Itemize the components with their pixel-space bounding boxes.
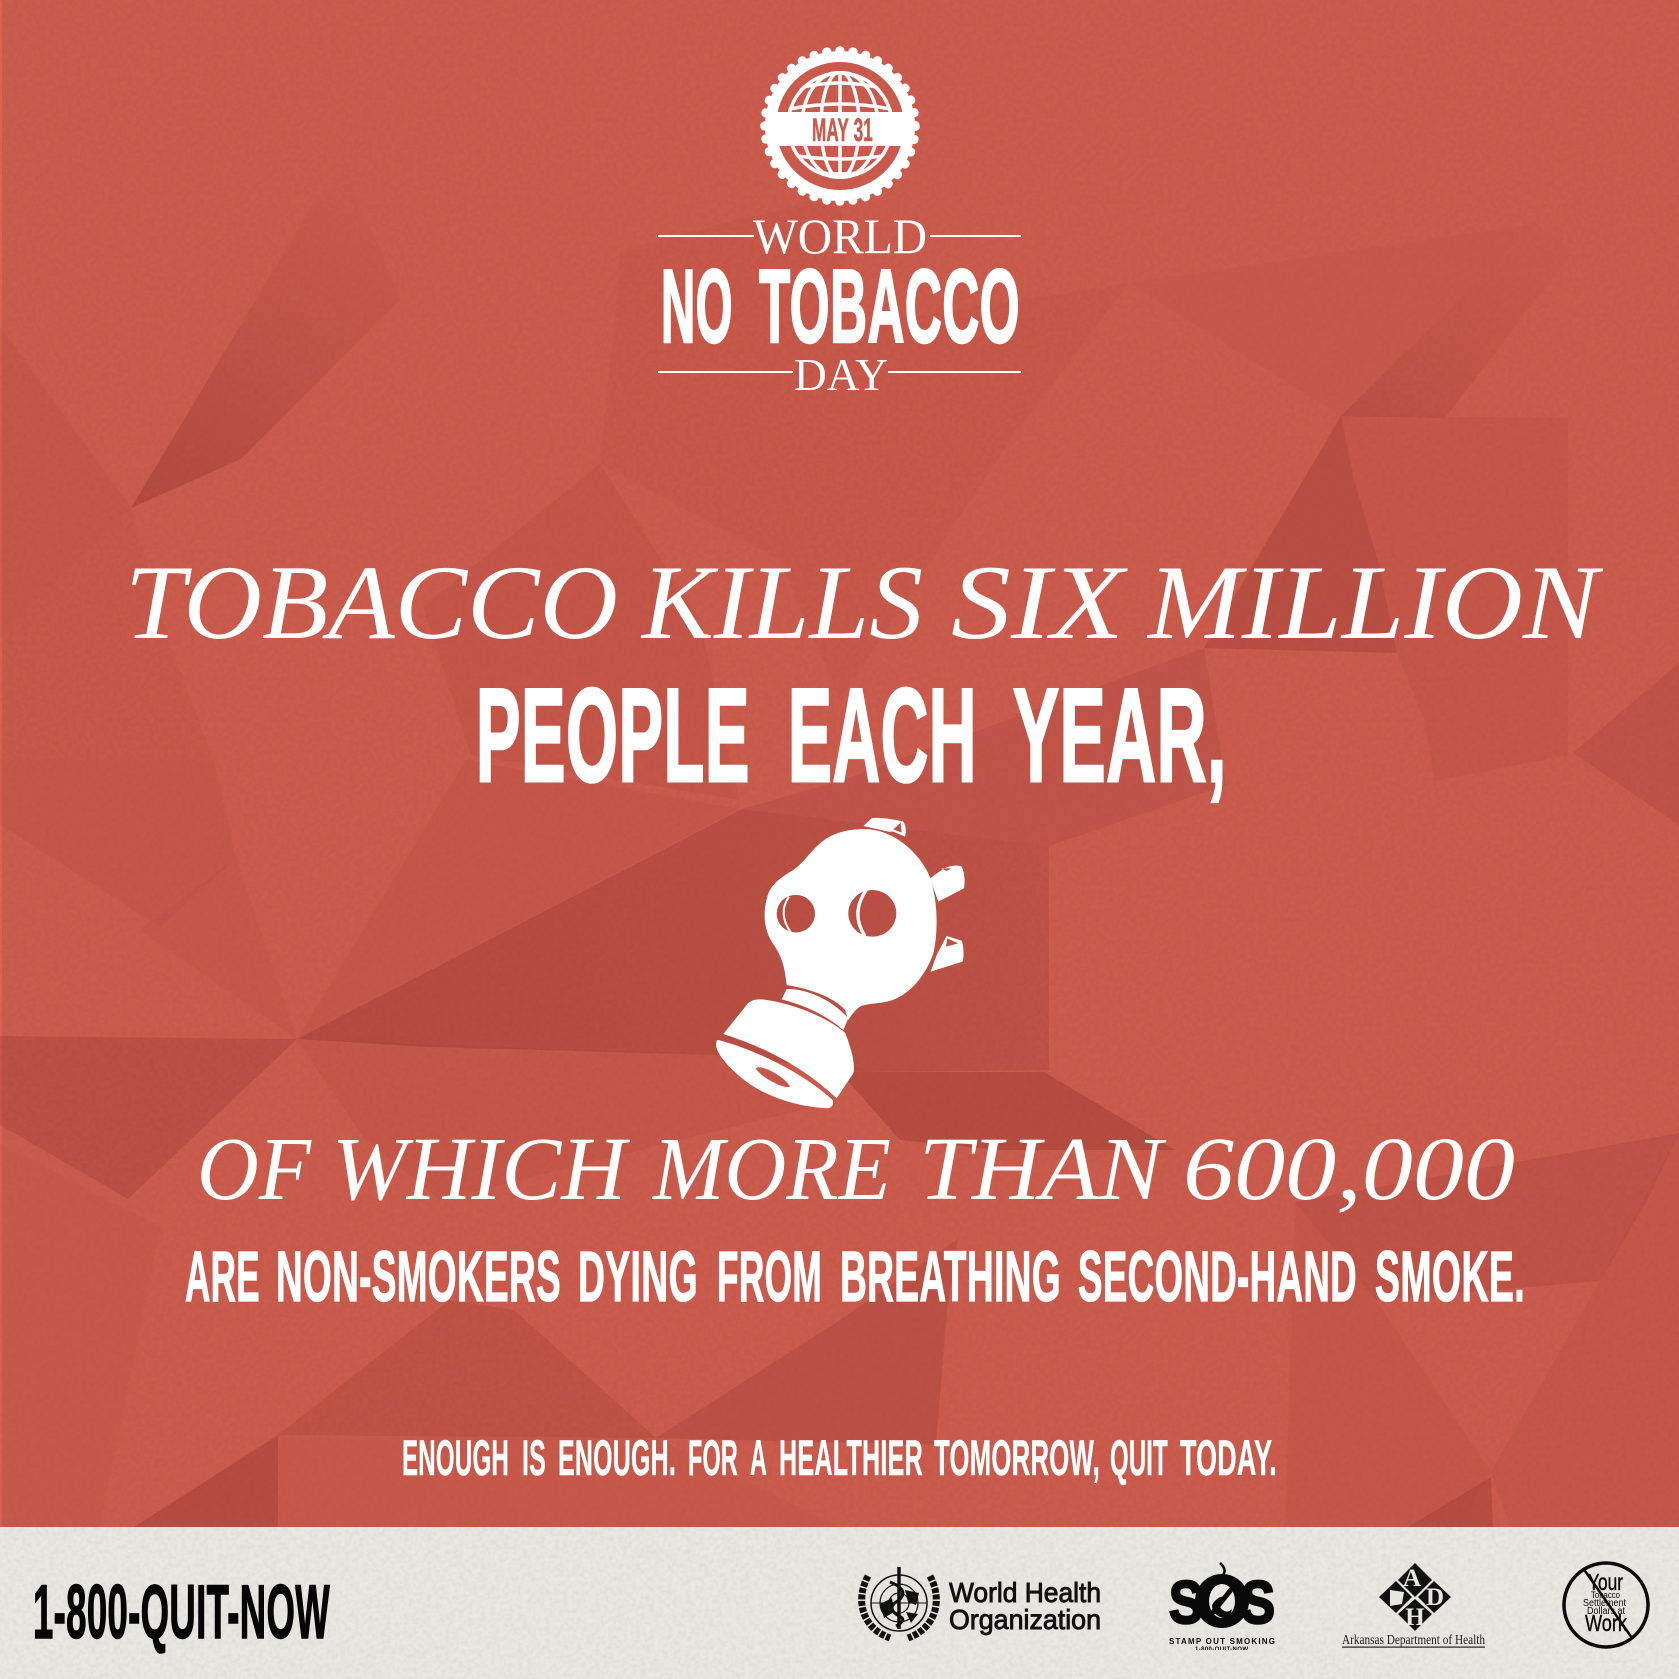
subhead line 2: SMOKE.: [1375, 1238, 1525, 1317]
tagline: TODAY.: [1180, 1430, 1277, 1486]
bottom paper band: [0, 1527, 1679, 1679]
logo: Stamp Out Smoking: S: [1169, 1569, 1203, 1636]
tagline: FOR: [688, 1430, 738, 1486]
headline line 1: MILLION: [1146, 544, 1604, 661]
ADH diamonds: [1379, 1563, 1451, 1631]
headline line 1: [125, 544, 1604, 661]
text: TOBACCO: [759, 249, 1020, 365]
tagline: QUIT: [1110, 1430, 1168, 1486]
headline line 1: KILLS: [640, 544, 923, 661]
WHO emblem: [862, 1567, 936, 1638]
tagline: IS: [522, 1430, 546, 1486]
title: no tobacco: NO: [661, 249, 733, 365]
ADH name: Arkansas Department of Health: [1342, 1633, 1485, 1648]
tagline: [402, 1430, 1277, 1486]
headline line 2: EACH: [788, 662, 977, 810]
badge date text: MAY 31: [812, 112, 873, 148]
headline line 2: YEAR,: [1013, 662, 1227, 810]
logo: Arkansas Department of Health: H: [1405, 1604, 1425, 1631]
title: world: WORLD: [753, 208, 927, 264]
logo: Stamp Out Smoking: [1169, 1563, 1275, 1653]
subhead line 2: BREATHING: [840, 1238, 1061, 1317]
tagline: TOMORROW,: [934, 1430, 1100, 1486]
logo: Your Tobacco Settlement Dollars at Work: Settlement: [1583, 1598, 1626, 1609]
logo: Stamp Out Smoking: S: [1241, 1569, 1275, 1636]
logo: Stamp Out Smoking: STAMP OUT SMOKING: [1169, 1637, 1275, 1646]
icon: gas mask: [716, 818, 965, 1108]
logo: Your Tobacco Settlement Dollars at Work: Work: [1585, 1610, 1627, 1636]
tagline: ENOUGH: [402, 1430, 509, 1486]
logo: Your Tobacco Settlement Dollars at Work: Dollars at: [1587, 1606, 1625, 1617]
headline line 1: SIX: [951, 544, 1129, 661]
subhead line 1: 600,000: [1183, 1120, 1515, 1219]
logo: Arkansas Department of Health: D: [1426, 1584, 1444, 1611]
logo: Your Tobacco Settlement Dollars at Work: Tobacco: [1591, 1590, 1620, 1600]
headline line 1: TOBACCO: [125, 544, 618, 661]
title lockup: [658, 208, 1021, 400]
subhead line 1: THAN: [919, 1120, 1167, 1219]
subhead line 2: [185, 1238, 1525, 1317]
logo: Your Tobacco Settlement Dollars at Work: Your: [1588, 1569, 1623, 1595]
subhead line 1: WHICH: [332, 1120, 631, 1219]
logo: World Health Organization: Organization: [949, 1604, 1101, 1635]
subhead line 2: ARE: [185, 1238, 260, 1317]
tagline: HEALTHIER: [779, 1430, 923, 1486]
subhead line 2: NON-SMOKERS: [276, 1238, 561, 1317]
subhead line 1: OF: [197, 1120, 312, 1219]
logo: World Health Organization: [862, 1567, 1101, 1638]
title: day: DAY: [794, 349, 888, 400]
subhead line 1: [197, 1120, 1515, 1219]
logo: Your Tobacco Settlement Dollars at Work: [1564, 1563, 1648, 1647]
subhead line 2: FROM: [717, 1238, 822, 1317]
logo: Arkansas Department of Health: A: [1403, 1565, 1421, 1592]
tagline: A: [750, 1430, 767, 1486]
text: 1-800-QUIT-NOW: [33, 1570, 330, 1655]
logo: Arkansas Department of Health: [1342, 1563, 1485, 1648]
subhead line 2: SECOND-HAND: [1078, 1238, 1357, 1317]
headline line 2: PEOPLE: [476, 662, 750, 810]
tagline: ENOUGH.: [558, 1430, 676, 1486]
subhead line 2: DYING: [578, 1238, 698, 1317]
logo: Stamp Out Smoking: 1-800-QUIT-NOW: [1195, 1647, 1248, 1653]
subhead line 1: MORE: [651, 1120, 891, 1219]
badge: May 31 globe: [764, 50, 916, 202]
title: no tobacco: [661, 249, 1020, 365]
WHO wordmark: World Health: [949, 1577, 1101, 1608]
